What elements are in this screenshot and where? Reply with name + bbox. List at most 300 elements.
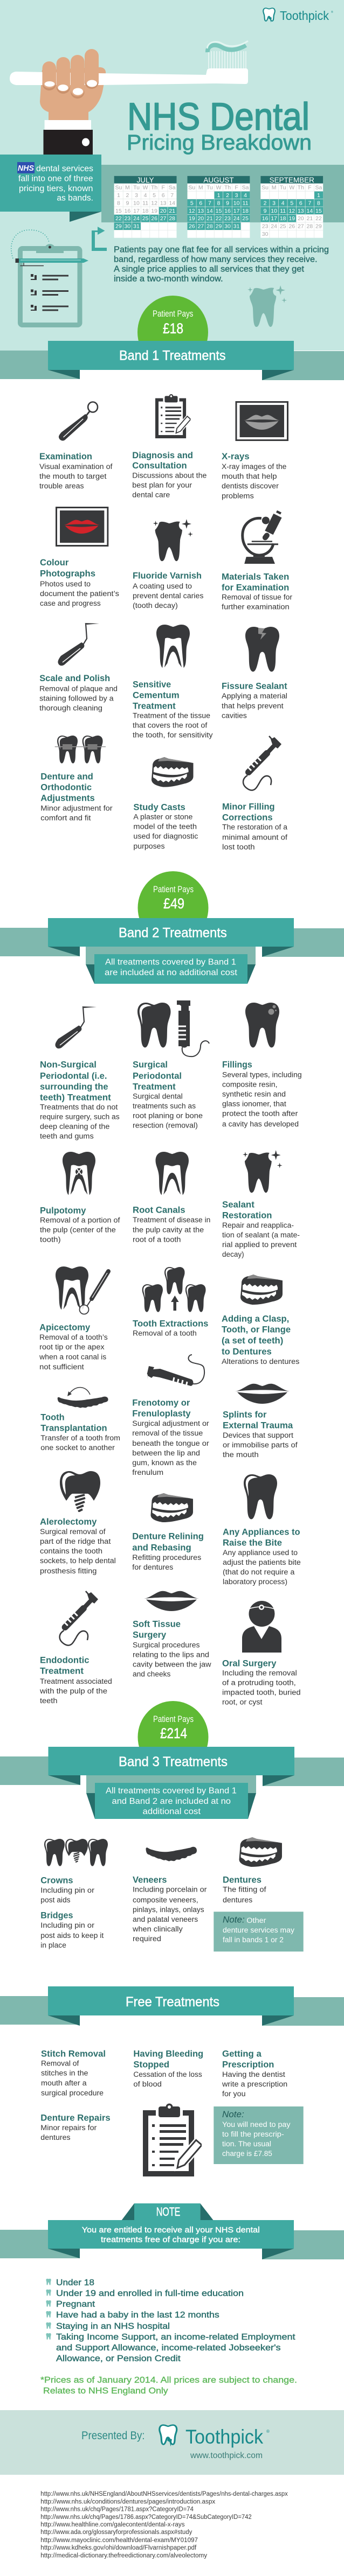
calendar: July: 26 [151, 215, 157, 222]
description [133, 582, 204, 610]
description: write a prescription [222, 2080, 287, 2088]
treatment: Adding a Clasp [222, 1275, 300, 1366]
heading [222, 1200, 272, 1220]
calendar: August: Th [224, 184, 231, 191]
treatment: Diagnosis and Consultation [132, 394, 207, 499]
calendar: September: 21 [307, 215, 313, 222]
description: A plaster or stone [133, 813, 192, 821]
panel: NHS pricing tiers ribbon: as bands. [57, 194, 93, 202]
treatment: Denture and Orthodontic Adjustments [40, 736, 113, 822]
heading: Soft Tissue [133, 1619, 181, 1629]
icon: dental drill [147, 1355, 204, 1387]
banner: NOTE free of charge: NOTE [156, 2205, 180, 2218]
heading: Treatment [133, 1082, 176, 1091]
icon: tooth cross-section [155, 1152, 189, 1196]
calendar: September: 17 [271, 215, 277, 222]
price badge: band 3: Patient Pays [153, 1714, 194, 1724]
heading: Denture Repairs [40, 2113, 111, 2123]
calendar: September: 27 [298, 223, 304, 230]
banner: Band 1 Treatments [0, 341, 344, 380]
description: comfort and fit [40, 814, 91, 822]
description [222, 692, 287, 720]
description: best plan for your [132, 481, 192, 489]
calendar: September: 18 [280, 215, 286, 222]
heading: Non-Surgical [40, 1060, 97, 1069]
note: prescription charge [214, 2106, 304, 2164]
treatment: Tooth Extractions [133, 1267, 208, 1338]
description: Crowns: Including pin or [40, 1886, 95, 1894]
calendar: August: Su [188, 184, 195, 191]
heading: Tooth, or Flange [222, 1325, 291, 1334]
description [223, 1549, 301, 1586]
description: Removal of a tooth [133, 1329, 197, 1338]
heading [40, 558, 95, 578]
calendar: August: 4 [244, 192, 247, 199]
calendar: July: 8 [117, 200, 120, 206]
calendar: September: 9 [264, 208, 267, 214]
banner: Band 1 Treatments: Band 1 Treatments [119, 348, 226, 363]
calendar: July: JULY [136, 176, 154, 184]
sources list: http://www.healthline.com/galecontent/dental-x-rays [40, 2522, 185, 2528]
heading [40, 772, 95, 803]
description: Removal of [41, 2060, 79, 2068]
description [132, 1419, 209, 1476]
description: mouth that help [222, 472, 277, 480]
description: not sufficient [39, 1363, 84, 1371]
calendar strip [101, 165, 344, 222]
description: (tooth decay) [133, 601, 178, 610]
description: composite veneers, [133, 1896, 198, 1904]
heading: Treatment [133, 701, 176, 711]
icon: sparkling tooth [247, 285, 287, 327]
description: purposes [133, 842, 165, 850]
icon: dental probe [58, 623, 99, 666]
heading: Sealant [222, 1200, 254, 1209]
description: Refitting procedures [132, 1553, 202, 1562]
panel: NHS pricing tiers ribbon: fall into one of three [18, 174, 93, 183]
description: of a protruding tooth, [222, 1679, 296, 1687]
description: dentures [40, 2133, 71, 2141]
description [132, 472, 207, 499]
calendar: September: F [308, 184, 312, 191]
description: Repair and reapplica- [222, 1221, 294, 1229]
icon: sparkling tooth [153, 519, 193, 561]
price badge: band 1: Patient Pays [153, 309, 193, 319]
banner: NOTE free of charge: treatments free of charge if you are: [101, 2235, 240, 2244]
description: Crowns [40, 1886, 95, 1904]
list: free treatment eligibility: Under 19 and enrolled in full-time education [56, 2289, 244, 2298]
disclaimer: prices: *Prices as of January 2014. All prices are subject to change. [40, 2376, 297, 2385]
calendar: August: 3 [235, 192, 238, 199]
description: and cheeks [133, 1670, 171, 1678]
icon: dental drill [60, 1591, 98, 1646]
calendar: September: 8 [317, 200, 320, 206]
description: Bridges [40, 1921, 104, 1949]
description [39, 685, 118, 712]
calendar: August: 23 [224, 215, 231, 222]
calendar: August: 28 [207, 223, 213, 230]
description: between the lip and [132, 1449, 200, 1457]
heading: and Rebasing [132, 1543, 191, 1552]
title: Pricing Breakdown [127, 131, 312, 155]
calendar: July: 31 [133, 223, 140, 230]
description: required [133, 1935, 161, 1943]
calendar: September: Th [298, 184, 304, 191]
icon: teeth row [146, 1847, 197, 1861]
calendar: August: 25 [242, 215, 249, 222]
description [41, 2060, 104, 2097]
calendar: September: SEPTEMBER [270, 176, 314, 184]
banner: Band 3 Treatments: Band 3 Treatments [119, 1754, 228, 1769]
description: for dentures [132, 1563, 174, 1571]
calendar: September: 4 [281, 200, 285, 206]
banner: Band 2 Treatments [0, 918, 344, 957]
heading: X-rays [222, 452, 250, 461]
description: Bridges: in place [40, 1941, 66, 1949]
calendar: July: 11 [142, 200, 148, 206]
icon: dental mirror [59, 402, 98, 440]
sources list: http://www.nhs.uk/chq/Pages/1786.aspx?CategoryID=74&SubCategoryID=742 [40, 2514, 252, 2521]
description [222, 463, 286, 500]
description: The fitting of [223, 1886, 266, 1894]
description: staining followed by a [39, 695, 114, 703]
footer: presented by: Toothpick [185, 2426, 263, 2448]
description: beneath the tongue or [132, 1439, 209, 1447]
calendar: August: 8 [217, 200, 221, 206]
description: the pulp (center of the [40, 1226, 116, 1234]
heading [133, 680, 180, 711]
calendar: August: 15 [216, 208, 222, 214]
description [40, 1216, 120, 1244]
heading [40, 1060, 111, 1102]
description: Removal of a tooth’s [39, 1333, 108, 1341]
text: flat fee explanation: A single price applies to all services that they get [114, 264, 305, 274]
heading: Fillings [222, 1060, 252, 1069]
heading: Diagnosis and [132, 451, 193, 460]
treatment: Crowns and Bridges [40, 1839, 108, 1949]
heading: Stopped [133, 2060, 169, 2069]
calendar: September: 3 [272, 200, 276, 206]
heading: Colour [40, 558, 69, 568]
description: when clinically [132, 1925, 183, 1933]
heading [133, 1619, 181, 1640]
treatment: Fissure Sealant [222, 627, 287, 720]
calendar: August: Sa [242, 184, 249, 191]
note: other denture services: fall in bands 1 or 2 [223, 1936, 284, 1944]
description: that covers the root of [133, 722, 208, 730]
heading: Alerolectomy [40, 1517, 97, 1527]
panel: NHS pricing tiers ribbon [0, 155, 101, 222]
calendar: September: 15 [315, 208, 322, 214]
sources list: http://www.nhs.uk/chq/Pages/1781.aspx?CategoryID=74 [40, 2506, 194, 2512]
calendar: September: 24 [271, 223, 277, 230]
calendar: September: 5 [290, 200, 293, 206]
icon: tooth with pulp removal [63, 1152, 95, 1196]
calendar: September [260, 176, 323, 238]
calendar: July: 20 [160, 208, 167, 214]
description: Treatment of the tissue [133, 712, 210, 720]
illustration: hand holding toothbrush [10, 41, 248, 155]
description: adjust the patients bite [223, 1558, 301, 1566]
calendar: August: 11 [243, 200, 249, 206]
calendar: July: 18 [142, 208, 149, 214]
heading: Corrections [222, 813, 273, 822]
icon: clipboard [155, 394, 191, 438]
description: or immobilise parts of [223, 1441, 298, 1449]
description: the pulp cavity at the [133, 1226, 204, 1234]
calendar: July: 2 [126, 192, 129, 199]
description: root planing or bone [133, 1112, 203, 1120]
calendar: July: 16 [125, 208, 130, 214]
description: the mouth to target [39, 472, 107, 480]
treatment: Non-Surgical Periodontal [40, 1006, 120, 1140]
calendar: July: 1 [117, 192, 120, 199]
title: NHS Dental [127, 96, 309, 138]
calendar: July: Tu [133, 184, 140, 191]
logo: Toothpick top: ® [331, 10, 333, 14]
text: flat fee explanation: Patients pay one flat fee for all services within a pricing [114, 245, 329, 254]
treatment: Stitch Removal [41, 2049, 106, 2097]
description: impacted tooth, buried [222, 1689, 301, 1697]
heading: Any Appliances to [223, 1527, 300, 1537]
list: free treatment eligibility: Staying in an NHS hospital [56, 2322, 170, 2331]
description: Treatments that do not [40, 1103, 118, 1111]
heading: Endodontic [40, 1655, 90, 1665]
panel: NHS pricing tiers ribbon: dental services [36, 164, 93, 173]
calendar: July: 5 [153, 192, 156, 199]
calendar: July [114, 176, 177, 238]
treatment: Apicectomy [39, 1266, 108, 1371]
text: flat fee explanation [114, 245, 329, 283]
description [133, 813, 198, 850]
treatment: Tooth Transplantation [40, 1388, 120, 1452]
icon: dental implant [60, 1471, 100, 1511]
price badge: band 3 [138, 1701, 208, 1773]
description: Having the dentist [222, 2070, 285, 2078]
description: root of a tooth [133, 1236, 181, 1244]
heading: Denture and [40, 772, 93, 781]
description: Devices that support [223, 1431, 293, 1439]
calendar: September: 26 [288, 223, 295, 230]
description: Visual examination of [39, 463, 113, 471]
list: free treatment eligibility: Taking Income Support, an income-related Employment [56, 2333, 295, 2342]
calendar: July: 12 [151, 200, 157, 206]
note: prescription charge: tion. The usual [222, 2140, 271, 2148]
calendar: July: 4 [144, 192, 147, 199]
description: Treatment associated [40, 1677, 112, 1685]
sub-banner: band 3 includes bands 1 and 2: All treatments covered by Band 1 [106, 1787, 237, 1796]
calendar: July: 29 [115, 223, 122, 230]
description: used for diagnostic [133, 832, 198, 841]
calendar: July: Su [115, 184, 122, 191]
description: treatments such as [133, 1102, 196, 1110]
treatment: X-rays [222, 401, 288, 500]
description: Any appliance used to [223, 1549, 298, 1557]
list: free treatment eligibility: and Support Allowance, income-related Jobseeker's [56, 2343, 281, 2353]
calendar: July: 22 [115, 215, 122, 222]
icon: teeth row with arrow [58, 1388, 108, 1408]
icon: clipboard large [143, 2103, 202, 2176]
treatment: Root Canals [133, 1152, 210, 1244]
description: teeth [40, 1697, 57, 1705]
description: Surgical dental [133, 1093, 183, 1101]
treatment: Surgical Periodontal [133, 1000, 209, 1130]
treatment: Soft Tissue Surgery [133, 1591, 211, 1678]
calendar: August: 17 [233, 208, 240, 214]
treatment: Dentures [223, 1837, 282, 1904]
description: root, or cyst [222, 1698, 263, 1706]
banner: Free Treatments [0, 1986, 344, 2026]
heading [133, 2049, 203, 2069]
heading: Orthodontic [40, 782, 92, 792]
description: a cavity has developed [222, 1120, 299, 1128]
description [40, 1434, 120, 1452]
icon: tooth with fillings [245, 1003, 279, 1047]
calendar: August: AUGUST [203, 176, 234, 184]
calendar: August: 18 [242, 208, 249, 214]
description [222, 1221, 300, 1258]
icon: dentures [240, 1275, 283, 1305]
note: other denture services: denture services may [223, 1926, 294, 1934]
calendar: August: 2 [226, 192, 229, 199]
calendar: August: Tu [207, 184, 213, 191]
heading: Raise the Bite [223, 1538, 282, 1548]
calendar: September: 10 [271, 208, 277, 214]
description: prosthesis fitting [40, 1567, 97, 1575]
heading [223, 1527, 300, 1548]
description [222, 593, 293, 611]
list: free treatment eligibility: Pregnant [56, 2300, 95, 2309]
calendar: September: 19 [288, 215, 295, 222]
description: require surgery, such as [40, 1113, 120, 1121]
banner: Free Treatments: Free Treatments [126, 1994, 219, 2010]
treatment: Veneers [132, 1847, 207, 1943]
description [40, 1528, 116, 1575]
heading: Veneers [133, 1875, 167, 1885]
icon: dental drill [243, 736, 281, 790]
calendar: September: 12 [288, 208, 295, 214]
treatment: Any Appliances to Raise the Bite [223, 1474, 301, 1586]
description: A coating used to [133, 582, 192, 590]
description [133, 1641, 211, 1678]
text: flat fee explanation: band, regardless of how many services they receive. [114, 255, 317, 264]
heading: Sensitive [133, 680, 171, 689]
banner: NOTE free of charge [0, 2203, 344, 2259]
banner: NOTE free of charge: You are entitled to receive all your NHS dental [82, 2225, 260, 2235]
description: dentists discover [222, 482, 279, 490]
description: Transfer of a tooth from [40, 1434, 120, 1442]
description: dental care [132, 491, 170, 499]
list: free treatment eligibility: Have had a baby in the last 12 months [56, 2311, 219, 2320]
calendar: July: 14 [169, 200, 175, 206]
description: rial applied to prevent [222, 1241, 297, 1249]
heading: Minor Filling [222, 802, 275, 811]
icon: microscope [243, 512, 281, 564]
calendar: July: 30 [125, 223, 130, 230]
price badge: band 1 [137, 296, 208, 369]
note: prescription charge: charge is £7.85 [222, 2150, 272, 2158]
description: contains the tooth [40, 1547, 102, 1555]
icon: tooth and drill [137, 1000, 209, 1056]
treatment: Fluoride Varnish [133, 519, 204, 610]
sub-banner: band 2 includes band 1 [86, 947, 256, 984]
description: Removal of plaque and [39, 685, 118, 693]
heading: Tooth [40, 1412, 65, 1422]
heading [40, 1655, 90, 1676]
disclaimer: prices: Relates to NHS England Only [43, 2386, 168, 2396]
treatment: Getting a Prescription [222, 2049, 287, 2098]
description: of blood [133, 2080, 162, 2088]
calendar: August: 30 [224, 223, 231, 230]
heading: for Examination [222, 583, 289, 592]
calendar: September: Su [262, 184, 269, 191]
heading [40, 1412, 107, 1433]
description: pinlays, inlays, onlays [133, 1906, 204, 1914]
description [40, 804, 113, 822]
list: free treatment eligibility: Allowance, or Pension Credit [56, 2354, 181, 2363]
heading [222, 1314, 291, 1356]
description: Removal of tissue for [222, 593, 293, 601]
description: frenulum [132, 1468, 163, 1476]
treatment: Pulpotomy [40, 1152, 120, 1244]
description: further examination [222, 603, 290, 611]
icon: tooth cross-section [156, 625, 190, 669]
heading: Scale and Polish [39, 674, 110, 683]
calendar: September: 6 [299, 200, 302, 206]
calendar: July: 3 [135, 192, 138, 199]
description: Applying a material [222, 692, 287, 700]
icon: cracked tooth [245, 627, 279, 671]
calendar: September: 30 [262, 231, 269, 237]
calendar: September: 28 [307, 223, 313, 230]
description: Surgical adjustment or [132, 1419, 209, 1427]
calendar: September: 2 [264, 200, 267, 206]
description: mouth after a [41, 2079, 87, 2087]
calendar: July: 28 [169, 215, 175, 222]
description: Surgical removal of [40, 1528, 106, 1536]
calendar: July: Sa [169, 184, 176, 191]
description: laboratory process) [223, 1578, 287, 1586]
treatment: Having Bleeding Stopped [133, 2049, 203, 2088]
sub-banner: band 3 includes bands 1 and 2: additional cost [142, 1807, 201, 1816]
description: when a root canal is [39, 1353, 106, 1361]
calendar: August: 27 [197, 223, 204, 230]
note: other denture services: Other [246, 1916, 266, 1924]
calendar: July: 6 [162, 192, 165, 199]
calendar: August: 12 [189, 208, 195, 214]
icon: dental probe [55, 1006, 97, 1048]
disclaimer: prices [40, 2376, 297, 2396]
description: The restoration of a [222, 823, 287, 831]
calendar: August: 22 [216, 215, 222, 222]
icon: photo of red lips [56, 507, 108, 547]
description: tooth) [40, 1236, 61, 1244]
heading [132, 1398, 191, 1418]
calendar: August [188, 176, 250, 238]
heading: Root Canals [133, 1205, 185, 1215]
description: gum, known as the [132, 1459, 197, 1467]
heading: Getting a [222, 2049, 262, 2059]
treatment: Frenotomy or Frenuloplasty [132, 1355, 209, 1476]
description: that helps prevent [222, 702, 284, 710]
calendar: August: 24 [233, 215, 240, 222]
heading: Adding a Clasp, [222, 1314, 289, 1324]
treatment: Sensitive Cementum Treatment [133, 625, 213, 739]
heading [223, 1410, 293, 1430]
calendar: September: 13 [298, 208, 304, 214]
sources list: http://www.nhs.uk/NHSEngland/AboutNHSservices/dentists/Pages/nhs-dental-charges.aspx [40, 2491, 288, 2497]
treatment: Oral Surgery [222, 1601, 301, 1706]
